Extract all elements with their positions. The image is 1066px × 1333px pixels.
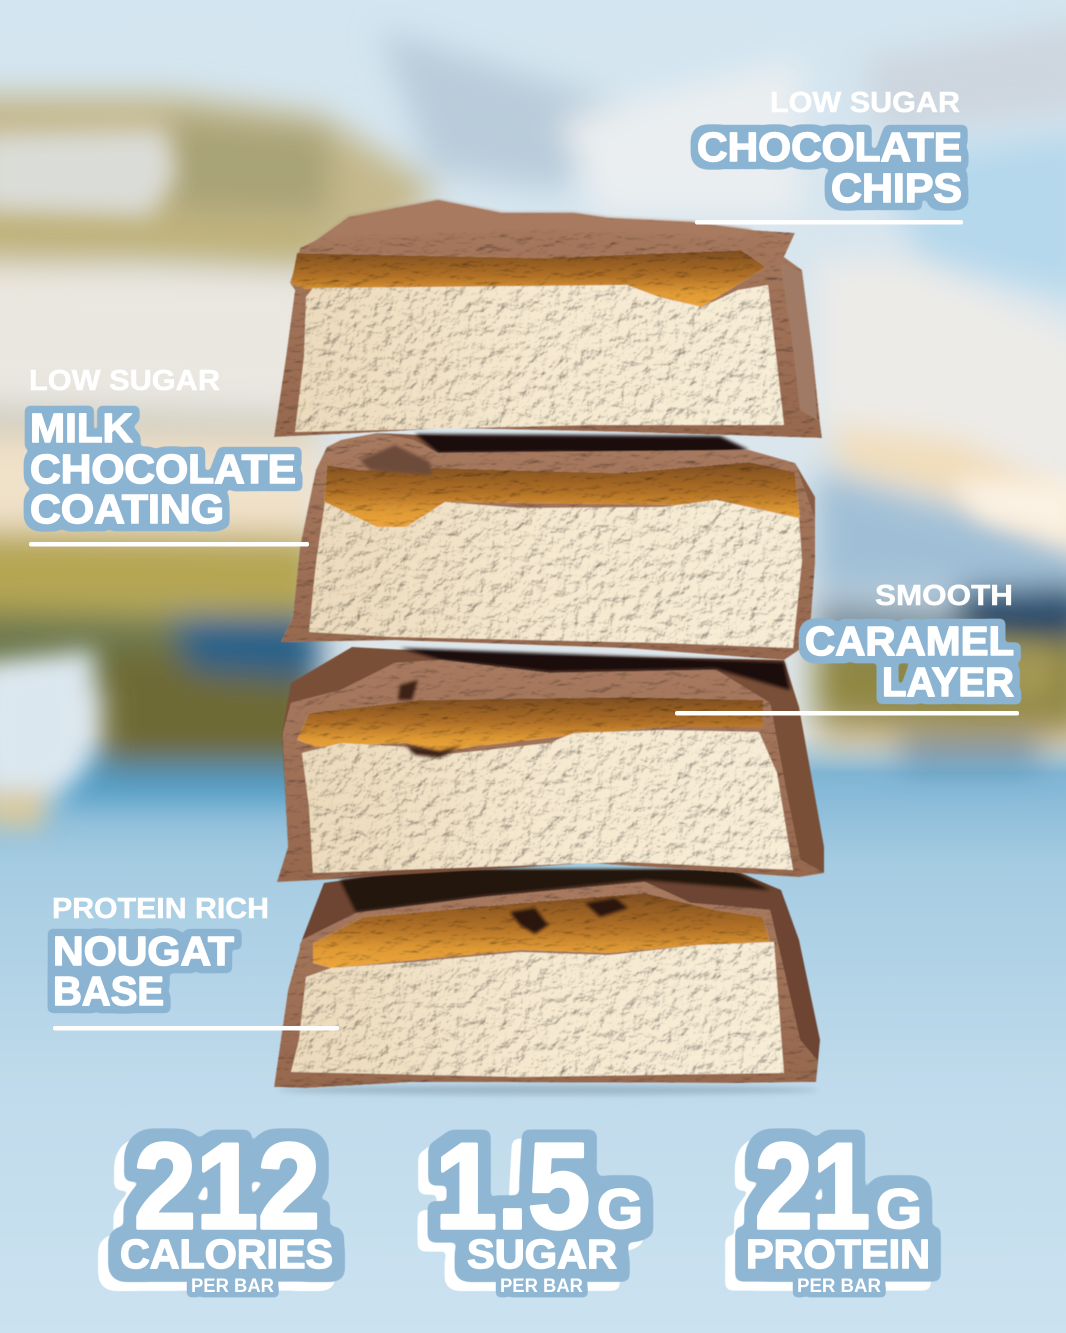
- caramel: [291, 250, 766, 307]
- stat: calories: PER BAR: [191, 1276, 274, 1297]
- coating heading: COATING: [30, 486, 224, 532]
- stat: calories: CALORIES: [120, 1231, 333, 1277]
- caramel subtitle: SMOOTH: [875, 580, 1013, 612]
- coating subtitle: LOW SUGAR: [29, 365, 220, 397]
- nougat: [302, 730, 793, 873]
- leader line: [695, 220, 963, 224]
- callout: milk chocolate coating: [29, 365, 309, 546]
- callout: caramel layer: [675, 580, 1019, 716]
- nougat heading: NOUGAT: [53, 928, 234, 974]
- upper surface: [316, 200, 752, 242]
- dark gap: [400, 648, 790, 690]
- bar 1 (top): [274, 200, 822, 438]
- leader line: [29, 542, 309, 546]
- caramel heading: [805, 618, 1014, 705]
- caramel heading: CARAMEL: [805, 618, 1014, 664]
- nougat subtitle: PROTEIN RICH: [52, 893, 269, 925]
- caramel dome shadow: [360, 445, 432, 475]
- caramel: [313, 893, 770, 968]
- caramel heading: LAYER: [882, 659, 1014, 705]
- stat: protein: [746, 1118, 930, 1297]
- leader line: [675, 711, 1019, 716]
- nougat heading: BASE: [53, 968, 164, 1014]
- stat: sugar: G: [597, 1177, 643, 1240]
- coating back: [290, 870, 820, 1082]
- stat: calories: 212: [134, 1118, 320, 1254]
- coating back: [277, 647, 824, 882]
- coating heading: MILK: [30, 405, 133, 451]
- coating heading: [30, 405, 296, 532]
- bar 3: [277, 647, 824, 882]
- nougat heading: [53, 928, 234, 1014]
- caramel: [297, 697, 763, 753]
- nougat: [295, 285, 784, 432]
- leader line: [53, 1026, 339, 1030]
- coating face: [277, 660, 824, 882]
- nougat: [309, 500, 802, 648]
- stat: sugar: [435, 1118, 643, 1297]
- coating: [274, 200, 822, 438]
- stat: protein: PROTEIN: [746, 1231, 930, 1277]
- caramel holes: [510, 898, 628, 934]
- nougat: [291, 942, 784, 1077]
- bar 2: [281, 433, 815, 660]
- callout: chocolate chips: [695, 87, 963, 224]
- stat: protein: PER BAR: [797, 1276, 881, 1297]
- stat: sugar: SUGAR: [467, 1231, 617, 1277]
- chocolate chips subtitle: LOW SUGAR: [770, 87, 960, 119]
- chocolate chips heading: CHOCOLATE: [697, 124, 962, 170]
- coating back: [281, 433, 815, 660]
- callout: nougat base: [52, 893, 339, 1030]
- stat: protein: 21: [755, 1118, 870, 1254]
- side wall: [780, 262, 817, 420]
- bar 4 (bottom): [274, 869, 820, 1088]
- caramel dark spot: [398, 680, 462, 758]
- coating face: [274, 882, 817, 1088]
- dark gap: [340, 869, 770, 912]
- coating face: [281, 433, 815, 660]
- stat: calories: [120, 1118, 333, 1297]
- dark gap: [415, 434, 749, 455]
- stat: sugar: 1.5: [435, 1118, 590, 1254]
- chocolate chips heading: CHIPS: [831, 165, 962, 211]
- caramel: [324, 462, 800, 528]
- coating heading: CHOCOLATE: [30, 446, 296, 492]
- chocolate chips heading: [697, 124, 962, 211]
- soft table shadow: [278, 1085, 818, 1095]
- stat: sugar: PER BAR: [500, 1276, 583, 1297]
- stat: protein: G: [876, 1177, 922, 1240]
